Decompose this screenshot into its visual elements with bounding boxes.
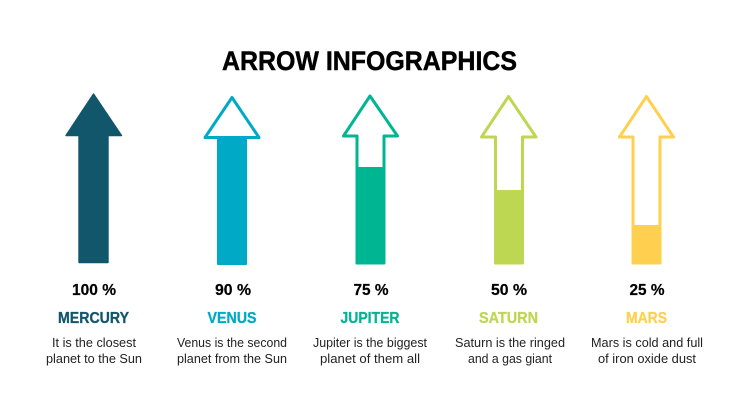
title: ARROW INFOGRAPHICS <box>222 46 517 76</box>
name: Venus: VENUS <box>208 310 257 327</box>
description: Mars: Mars is cold and full <box>591 336 703 350</box>
value: Mars: 25 % <box>630 282 664 299</box>
value: Venus: 90 % <box>215 282 251 299</box>
value: Jupiter: 75 % <box>354 282 388 299</box>
description: Jupiter: planet of them all <box>320 352 420 366</box>
column: Mars <box>591 96 703 366</box>
name: Saturn: SATURN <box>479 310 538 327</box>
description: Mercury: It is the closest <box>52 336 137 350</box>
description: Venus: Venus is the second <box>177 336 287 350</box>
name: Jupiter: JUPITER <box>340 310 400 327</box>
arrow: Mercury 100% <box>66 94 122 262</box>
name: Mars: MARS <box>626 310 667 327</box>
description: Mercury: planet to the Sun <box>46 352 142 366</box>
column: Venus <box>177 98 287 366</box>
description: Mars: of iron oxide dust <box>598 352 697 366</box>
arrow: Saturn 50% <box>482 96 536 264</box>
arrow: Venus 90% <box>205 98 259 265</box>
value: Saturn: 50 % <box>491 282 527 299</box>
arrow: Mars 25% <box>620 96 674 264</box>
description: Saturn: Saturn is the ringed <box>455 336 565 350</box>
name: Mercury: MERCURY <box>58 310 129 327</box>
arrow: Jupiter 75% <box>344 96 398 264</box>
description: Jupiter: Jupiter is the biggest <box>313 336 428 350</box>
column: Saturn <box>455 96 565 366</box>
column: Mercury <box>46 94 142 366</box>
column: Jupiter <box>313 96 428 366</box>
value: Mercury: 100 % <box>72 282 116 299</box>
description: Saturn: and a gas giant <box>468 352 553 366</box>
description: Venus: planet from the Sun <box>177 352 287 366</box>
